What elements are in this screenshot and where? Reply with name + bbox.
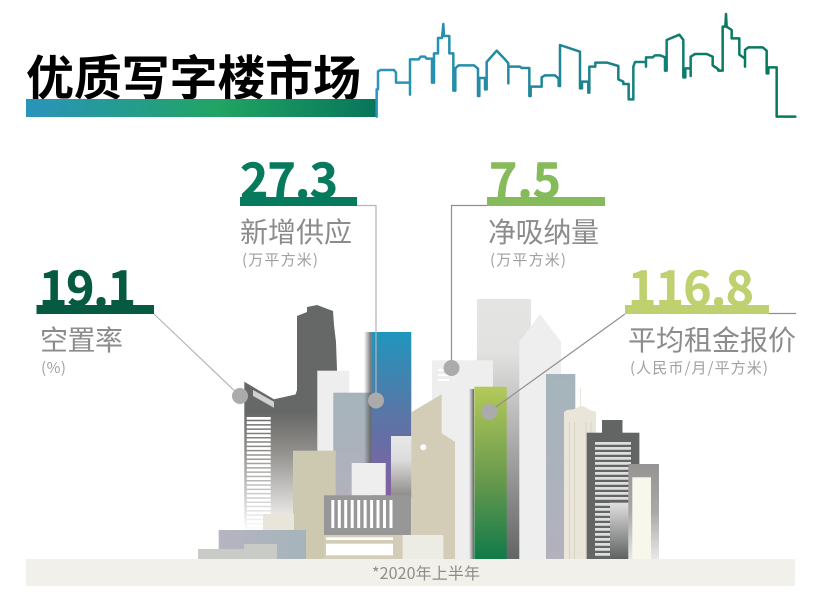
building: low grey steps xyxy=(198,544,277,559)
callout: 新增供应: 27.3 xyxy=(240,142,338,212)
building: white cube xyxy=(352,463,386,495)
building: beige base xyxy=(324,535,403,559)
callout: 新增供应: 新增供应 xyxy=(240,211,352,251)
title: 优质写字楼市场 xyxy=(26,39,361,109)
building: cream tower xyxy=(564,388,596,559)
skyline outline xyxy=(377,14,795,117)
footer band: *2020年上半年 xyxy=(372,560,480,584)
building: dark tower and wedge xyxy=(244,305,340,532)
callout: 新增供应 xyxy=(240,142,384,408)
city illustration xyxy=(198,299,659,559)
callout: 空置率: 19.1 xyxy=(39,250,136,320)
building: green tower xyxy=(469,387,507,559)
callout: 平均租金报价: 平均租金报价 xyxy=(628,319,796,359)
callout: 空置率: (%) xyxy=(41,357,66,378)
building: blue-grey right xyxy=(546,374,575,559)
building: dark striped block xyxy=(587,420,639,559)
callout: 净吸纳量: (万平方米) xyxy=(490,249,566,270)
callout: 净吸纳量: 净吸纳量 xyxy=(488,211,599,251)
footer band xyxy=(26,559,795,586)
callout: 新增供应: (万平方米) xyxy=(242,249,318,270)
building: back grey tower xyxy=(477,299,531,559)
callout: 平均租金报价: (人民币/月/平方米) xyxy=(630,357,768,378)
building: beige block xyxy=(293,451,336,559)
building: white pentagon tower xyxy=(519,314,561,559)
building: light gradient box xyxy=(391,436,411,496)
building: white centre-right xyxy=(432,360,493,559)
building: grey slatted block xyxy=(324,495,411,535)
building: cream low block xyxy=(263,514,294,530)
building: right small tower xyxy=(628,464,659,559)
building: blue gradient tower xyxy=(364,332,411,498)
building: blue-grey mid xyxy=(333,393,372,496)
callout: 平均租金报价: 116.8 xyxy=(628,250,754,320)
building: beige house xyxy=(412,394,455,559)
callout: 空置率: 空置率 xyxy=(40,319,123,359)
callout: 平均租金报价 xyxy=(481,250,796,420)
building: white mid tower xyxy=(317,371,349,452)
building: wide blue-grey base xyxy=(219,530,306,559)
building: pale base block xyxy=(403,535,443,559)
callout: 净吸纳量: 7.5 xyxy=(489,142,561,212)
callout: 净吸纳量 xyxy=(444,142,605,376)
callout: 空置率 xyxy=(36,250,248,404)
